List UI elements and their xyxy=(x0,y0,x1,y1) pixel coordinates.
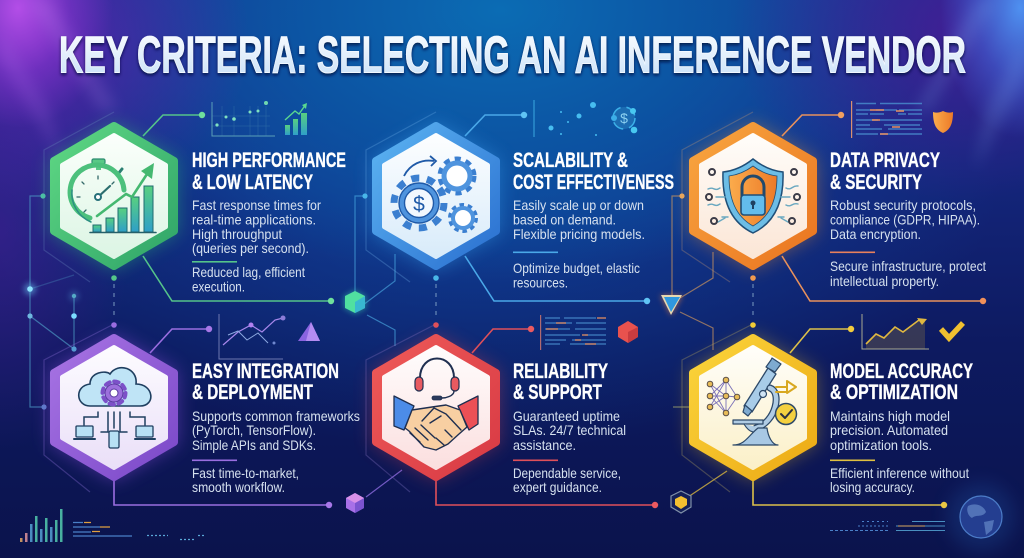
text block: Supports common frameworks xyxy=(192,408,360,424)
text block: Fast time-to-market, xyxy=(192,465,299,481)
icon: purple cube xyxy=(346,493,364,513)
hexagon: orange xyxy=(689,122,817,270)
heading xyxy=(830,148,940,194)
heading: & LOW LATENCY xyxy=(192,170,313,194)
text block: (queries per second). xyxy=(192,240,309,256)
text block: Guaranteed uptime xyxy=(513,408,620,424)
mini chart: green xyxy=(212,101,275,136)
text block: expert guidance. xyxy=(513,479,602,495)
text block: Optimize budget, elastic xyxy=(513,260,640,276)
icon: bar trend xyxy=(285,103,307,135)
connectors: purple xyxy=(114,326,332,508)
icon: dollar cycle: $ xyxy=(620,110,628,126)
text block: intellectual property. xyxy=(830,273,939,289)
text block: SLAs. 24/7 technical xyxy=(513,422,626,438)
heading: EASY INTEGRATION xyxy=(192,359,339,383)
hexagon: blue xyxy=(372,122,500,270)
text block xyxy=(513,197,645,290)
icon: gears with dollar xyxy=(394,156,476,231)
heading xyxy=(192,148,346,194)
icon: globe xyxy=(947,483,1015,551)
text block: Reduced lag, efficient xyxy=(192,264,305,280)
heading: SCALABILITY & xyxy=(513,148,628,172)
heading: & DEPLOYMENT xyxy=(192,380,313,404)
icon: stopwatch with rising bars xyxy=(70,159,156,232)
icon: shield and padlock xyxy=(706,159,800,233)
panel: scalability xyxy=(372,100,674,304)
text block: Dependable service, xyxy=(513,465,621,481)
data lines: bottom left xyxy=(73,522,205,540)
text block: smooth workflow. xyxy=(192,479,285,495)
icon: cloud deployment xyxy=(74,368,155,448)
text block: Efficient inference without xyxy=(830,465,969,481)
connectors: red xyxy=(436,326,658,508)
icon: headset and handshake xyxy=(394,358,478,450)
text block: Data encryption. xyxy=(830,226,921,242)
heading: & OPTIMIZATION xyxy=(830,380,958,404)
text block: compliance (GDPR, HIPAA). xyxy=(830,212,980,228)
panel: high performance xyxy=(50,101,346,304)
heading: COST EFFECTIVENESS xyxy=(513,170,674,194)
heading: RELIABILITY xyxy=(513,359,608,383)
mini bars: bottom left xyxy=(20,509,62,542)
mini line chart: purple xyxy=(219,314,286,359)
heading xyxy=(513,148,674,194)
text block: Simple APIs and SDKs. xyxy=(192,437,316,453)
green cube xyxy=(344,290,366,314)
text block xyxy=(830,408,969,495)
panel: model accuracy xyxy=(671,314,1015,551)
text block: execution. xyxy=(192,278,245,294)
network backbone lines xyxy=(30,112,753,497)
text block xyxy=(192,197,321,294)
text block: High throughput xyxy=(192,226,282,242)
icon: small shield xyxy=(933,111,953,133)
text block: assistance. xyxy=(513,437,576,453)
panel: reliability xyxy=(346,315,658,513)
text block: losing accuracy. xyxy=(830,479,915,495)
heading: DATA PRIVACY xyxy=(830,148,940,172)
text block: Maintains high model xyxy=(830,408,950,424)
mini area chart: gold xyxy=(862,314,929,349)
heading xyxy=(830,359,973,404)
icon: microscope with network xyxy=(707,358,796,445)
data lines: bottom right xyxy=(830,522,945,530)
hexagon: red xyxy=(372,334,500,481)
text block: (PyTorch, TensorFlow). xyxy=(192,422,316,438)
text block: Secure infrastructure, protect xyxy=(830,258,986,274)
text block: resources. xyxy=(513,274,568,290)
text block: Fast response times for xyxy=(192,197,321,213)
panel: easy integration xyxy=(20,314,360,542)
icon: gold check xyxy=(941,323,963,338)
hexagon: green xyxy=(50,122,178,270)
code lines: red xyxy=(540,315,606,350)
icon: red cube xyxy=(618,321,638,343)
blue triangle node xyxy=(660,295,683,316)
heading: & SECURITY xyxy=(830,170,922,194)
connectors: blue xyxy=(465,112,650,304)
heading xyxy=(192,359,339,404)
text block: Robust security protocols, xyxy=(830,197,976,213)
connectors: orange xyxy=(782,112,986,304)
text block xyxy=(192,408,360,495)
hexagon: yellow xyxy=(689,334,817,481)
text block: based on demand. xyxy=(513,212,616,228)
heading xyxy=(513,359,608,404)
hexagon: purple xyxy=(50,334,178,481)
icon: hex node xyxy=(671,491,691,513)
text block: real-time applications. xyxy=(192,212,316,228)
corner light beams xyxy=(0,0,1024,170)
icon: purple pyramid xyxy=(298,322,320,341)
heading: HIGH PERFORMANCE xyxy=(192,148,346,172)
network nodes xyxy=(24,193,756,410)
panel: data privacy xyxy=(689,101,986,304)
connectors: yellow xyxy=(753,326,947,508)
mini scatter: blue xyxy=(534,100,597,137)
text block xyxy=(830,197,986,289)
connectors: green xyxy=(143,112,334,304)
icon: gears with dollar: $ xyxy=(413,193,425,216)
text block xyxy=(513,408,626,495)
code lines: orange xyxy=(851,101,922,138)
text block: Easily scale up or down xyxy=(513,197,644,213)
heading: & SUPPORT xyxy=(513,380,602,404)
icon: dollar cycle xyxy=(611,107,637,133)
text block: optimization tools. xyxy=(830,437,932,453)
text block: Flexible pricing models. xyxy=(513,226,645,242)
text block: precision. Automated xyxy=(830,422,948,438)
